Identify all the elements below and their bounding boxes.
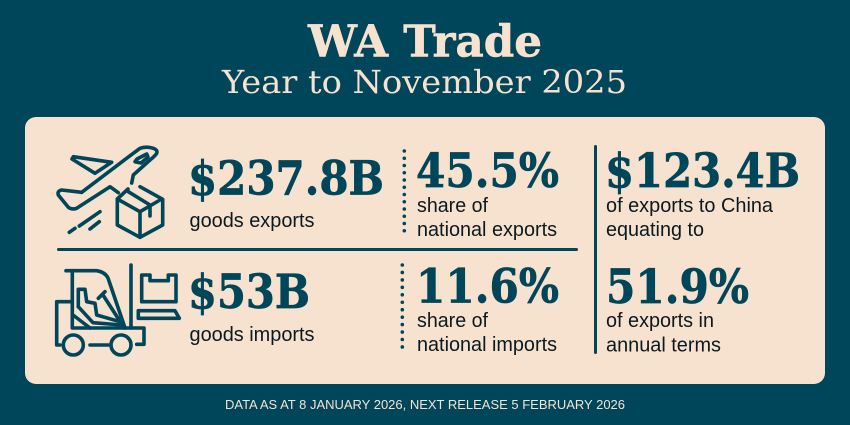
stat: share of national exports: share of	[417, 195, 488, 217]
title	[221, 16, 627, 101]
stat: goods imports: $53B	[188, 265, 310, 320]
main panel	[25, 117, 825, 384]
stat: share of national imports: national imports	[417, 334, 557, 356]
stat: annual terms	[606, 260, 749, 356]
stat: goods imports	[188, 265, 314, 346]
heading: WA Trade: WA Trade	[307, 16, 542, 68]
stat: exports to China: of exports to China	[606, 195, 774, 217]
divider: vertical solid	[594, 145, 597, 354]
stat: annual terms: annual terms	[606, 334, 721, 356]
stat: share of national exports: 45.5%	[416, 144, 559, 199]
stat: share of national imports: share of	[417, 310, 488, 332]
divider: horizontal	[57, 248, 578, 251]
stat: exports to China	[605, 144, 800, 241]
divider: dotted lower	[400, 265, 404, 347]
stat: annual terms: 51.9%	[606, 260, 749, 315]
stat: share of national imports	[416, 260, 559, 356]
stat: annual terms: of exports in	[606, 310, 714, 332]
stat: share of national imports: 11.6%	[416, 260, 559, 314]
divider: dotted upper	[402, 151, 406, 238]
stat: goods exports: $237.8B	[188, 152, 384, 206]
stat: goods exports: goods exports	[190, 210, 314, 232]
stat: goods exports	[188, 152, 384, 232]
footer note: DATA AS AT 8 JANUARY 2026, NEXT RELEASE 5 FEBRUARY 2026	[225, 398, 625, 412]
stat: share of national exports: national exports	[417, 219, 557, 241]
icon: plane and parcel	[58, 147, 163, 237]
stat: exports to China: $123.4B	[605, 144, 800, 199]
stat: exports to China: equating to	[606, 219, 704, 241]
icon: forklift	[57, 265, 179, 355]
stat: share of national exports	[416, 144, 559, 241]
subheading: Year to November 2025: Year to November 2025	[221, 63, 627, 101]
stat: goods imports: goods imports	[190, 324, 314, 346]
